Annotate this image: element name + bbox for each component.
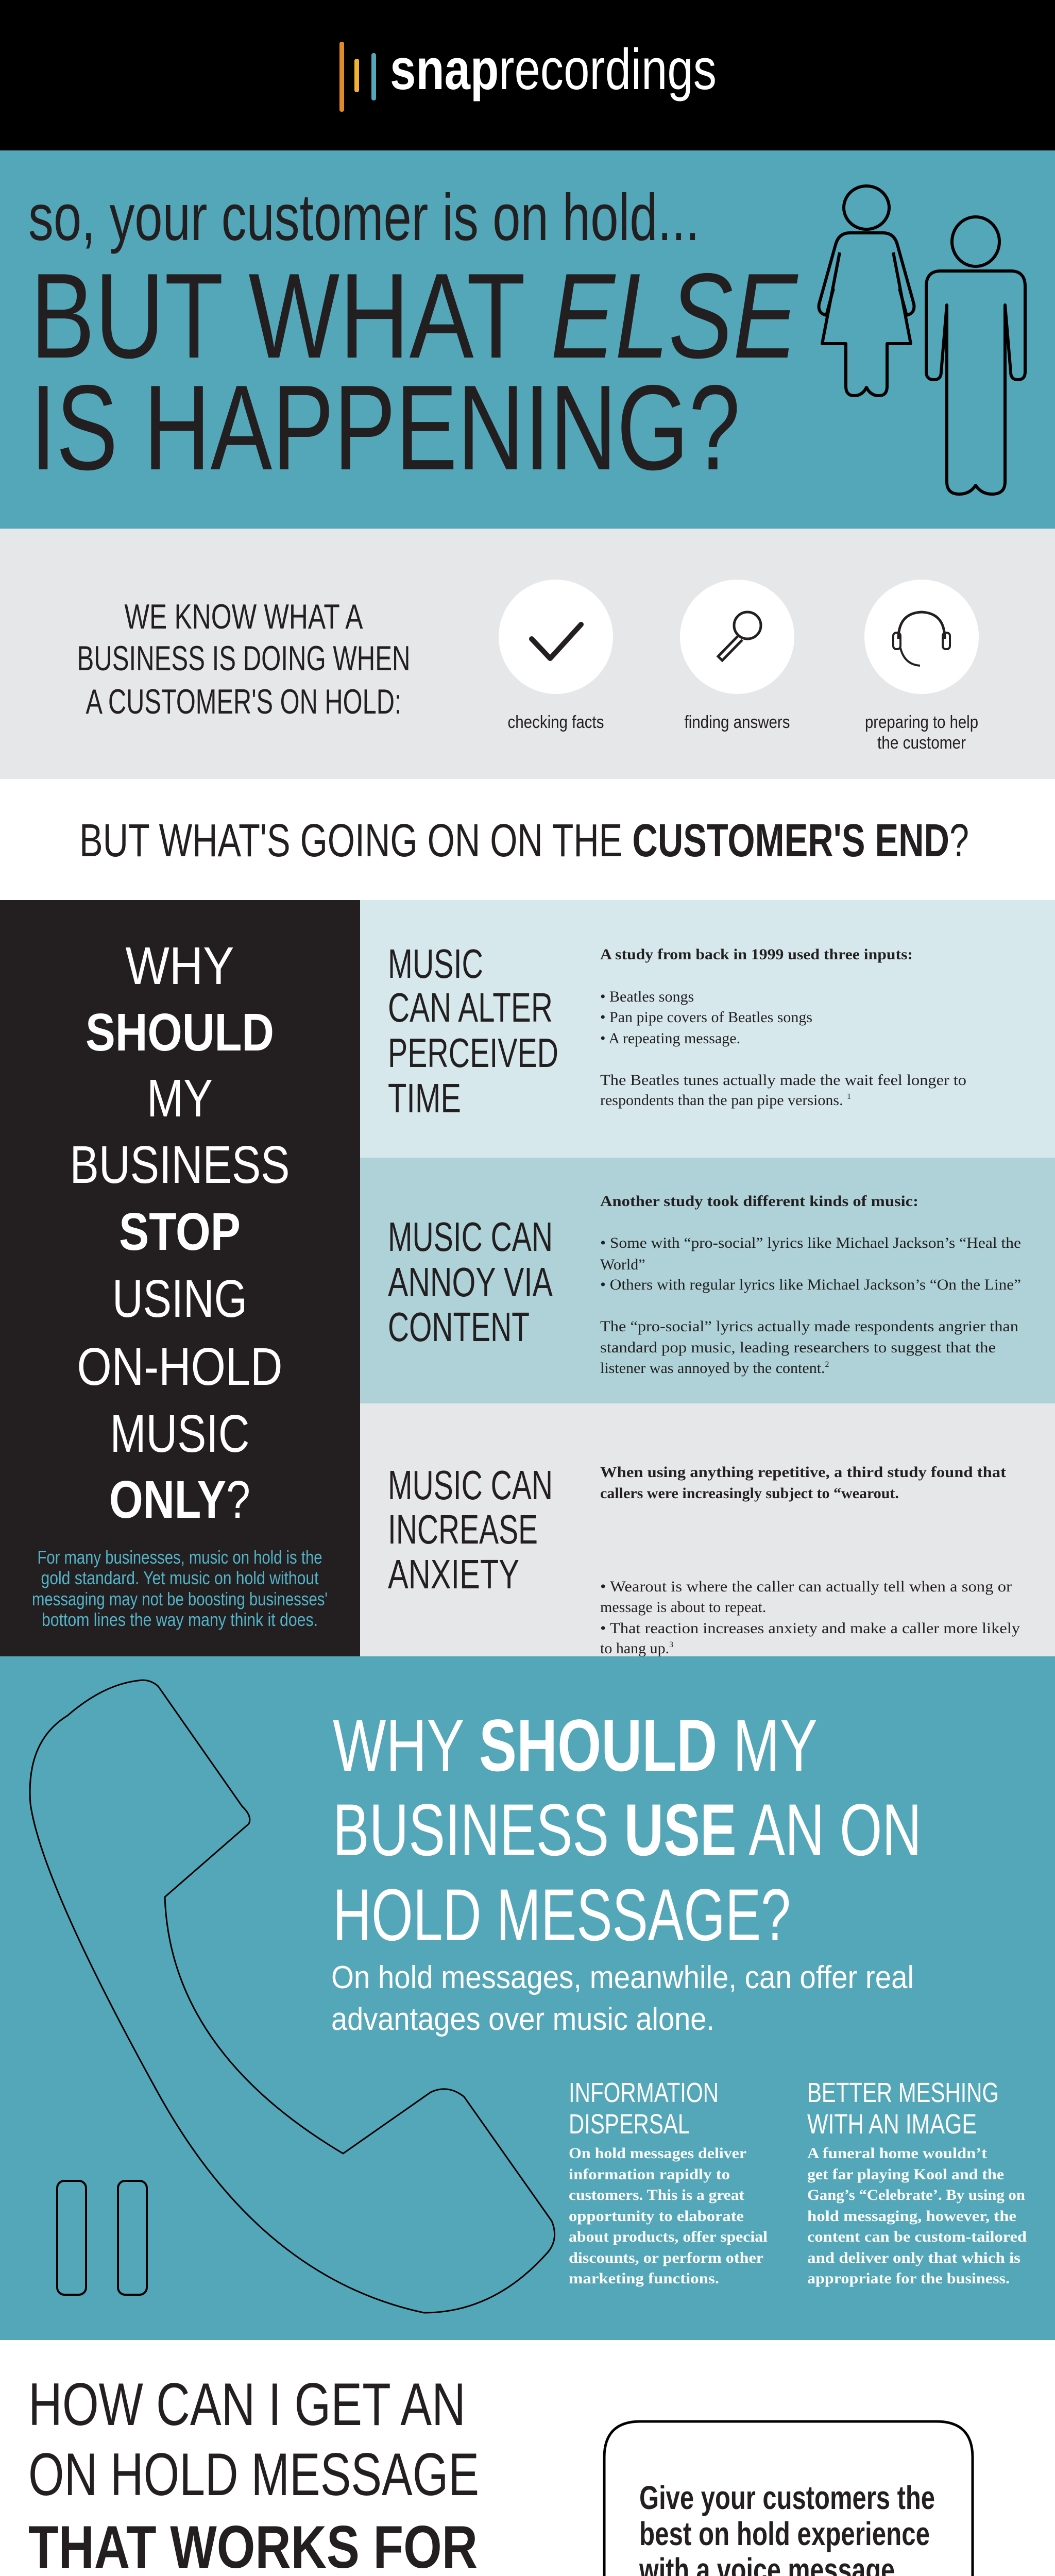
icon: checking facts: checking facts [508, 713, 604, 732]
row body: listener was annoyed by the content. [600, 1360, 825, 1377]
icon: pause bars [57, 2181, 147, 2295]
intro text [77, 597, 410, 721]
dark panel note: bottom lines the way many think it does. [42, 1609, 318, 1630]
subsection: better meshing: and deliver only that which is [807, 2249, 1020, 2266]
section subtitle [331, 1960, 914, 2037]
subsection: better meshing [807, 2077, 1027, 2287]
panel: music can annoy via content [360, 1158, 1055, 1403]
dark panel heading: USING [112, 1269, 247, 1328]
subsection: better meshing: Gang’s “Celebrate’. By using on [807, 2187, 1025, 2204]
dark panel note [32, 1547, 328, 1630]
row heading: ANNOY VIA [388, 1259, 553, 1305]
row body: • Wearout is where the caller can actually tell when a song or [600, 1578, 1012, 1595]
intro text: BUSINESS IS DOING WHEN [77, 639, 410, 678]
row heading [388, 1462, 553, 1597]
dark panel heading: MY [147, 1069, 213, 1128]
icon: headset: the customer [877, 733, 966, 753]
subsection: information dispersal: discounts, or perform other [569, 2249, 763, 2266]
dark panel note: messaging may not be boosting businesses' [32, 1588, 328, 1609]
row heading: MUSIC [388, 941, 483, 987]
dark panel heading: BUSINESS [70, 1135, 290, 1194]
subsection: better meshing: content can be custom-tailored [807, 2228, 1027, 2245]
heading: how can I get: HOW CAN I GET AN [28, 2370, 466, 2438]
subsection: better meshing: BETTER MESHING [807, 2077, 999, 2108]
icon: man figure [926, 217, 1025, 494]
row body: When using anything repetitive, a third study found that [600, 1464, 1006, 1481]
row body: • Some with “pro-social” lyrics like Michael Jackson’s “Heal the [600, 1234, 1021, 1251]
row body: callers were increasingly subject to “wearout. [600, 1485, 899, 1502]
callout: speech bubble [604, 2421, 973, 2576]
subsection: better meshing: WITH AN IMAGE [807, 2109, 977, 2140]
hero subtitle: so, your customer is on hold... [28, 181, 700, 255]
row heading: MUSIC CAN [388, 1214, 553, 1260]
icon: finding answers: finding answers [684, 713, 790, 732]
section subtitle: On hold messages, meanwhile, can offer real [331, 1960, 914, 1995]
subsection: information dispersal [569, 2077, 768, 2287]
dark panel heading [70, 936, 290, 1529]
row body [600, 1464, 1020, 1657]
panel: music can alter perceived time [360, 900, 1055, 1158]
row body: • A repeating message. [600, 1030, 740, 1047]
row body: 2 [825, 1360, 829, 1369]
row body: The Beatles tunes actually made the wait feel longer to [600, 1072, 966, 1089]
subsection: better meshing: get far playing Kool and the [807, 2166, 1004, 2183]
row body: World” [600, 1256, 645, 1273]
subsection: information dispersal: about products, offer special [569, 2228, 768, 2245]
row heading: TIME [388, 1075, 461, 1121]
row body: • Others with regular lyrics like Michael Jackson’s “On the Line” [600, 1276, 1021, 1293]
icon: headset [864, 580, 979, 753]
row body: to hang up. [600, 1640, 669, 1657]
subsection: information dispersal: information rapidly to [569, 2166, 730, 2183]
row heading: CAN ALTER [388, 985, 553, 1030]
hero title: BUT WHAT ELSE [30, 248, 798, 383]
icon: woman figure [819, 186, 914, 396]
hero title [30, 248, 798, 495]
section heading [333, 1705, 922, 1956]
subsection: information dispersal: customers. This is a great [569, 2187, 744, 2204]
row heading: PERCEIVED [388, 1030, 558, 1076]
heading: how can I get [28, 2370, 479, 2576]
icon: checking facts [499, 580, 613, 732]
row body: standard pop music, leading researchers to suggest that the [600, 1339, 996, 1356]
dark panel heading: ONLY? [109, 1470, 250, 1529]
row body: A study from back in 1999 used three inputs: [600, 946, 913, 963]
row heading: MUSIC CAN [388, 1462, 553, 1508]
row body: 1 [847, 1092, 851, 1101]
section heading: HOLD MESSAGE? [333, 1874, 791, 1956]
row body: • That reaction increases anxiety and make a caller more likely [600, 1620, 1020, 1637]
logo [339, 37, 717, 112]
subsection: information dispersal: DISPERSAL [569, 2109, 690, 2140]
row heading [388, 941, 558, 1121]
hero title: IS HAPPENING? [30, 360, 740, 495]
panel: why stop music only [0, 900, 360, 1656]
row body: respondents than the pan pipe versions. [600, 1092, 843, 1109]
dark panel heading: SHOULD [86, 1003, 274, 1062]
logo: snaprecordings [390, 37, 717, 101]
dark panel heading: STOP [119, 1202, 241, 1261]
section subtitle: advantages over music alone. [331, 2002, 714, 2037]
subsection: information dispersal: marketing functions. [569, 2270, 719, 2287]
intro text: A CUSTOMER'S ON HOLD: [86, 682, 402, 721]
dark panel note: For many businesses, music on hold is the [37, 1547, 322, 1568]
row body [600, 1193, 1021, 1377]
icon: finding answers [680, 580, 794, 732]
row heading: CONTENT [388, 1304, 530, 1350]
heading: how can I get: ON HOLD MESSAGE [28, 2441, 479, 2508]
panel: music can increase anxiety [360, 1403, 1055, 1657]
subsection: information dispersal: INFORMATION [569, 2077, 719, 2108]
row body: The “pro-social” lyrics actually made respondents angrier than [600, 1318, 1018, 1335]
subsection: better meshing: A funeral home wouldn’t [807, 2145, 987, 2162]
row body: 3 [669, 1640, 673, 1649]
heading: customer's end: BUT WHAT'S GOING ON ON THE CUSTOMER'S END? [79, 815, 969, 867]
row body: • Pan pipe covers of Beatles songs [600, 1009, 812, 1026]
panel: what a business is doing [0, 529, 1055, 779]
dark panel heading: MUSIC [110, 1404, 249, 1463]
row body: message is about to repeat. [600, 1599, 766, 1616]
row body [600, 946, 966, 1109]
row heading: ANXIETY [388, 1551, 519, 1597]
intro text: WE KNOW WHAT A [125, 597, 363, 636]
row heading: INCREASE [388, 1506, 538, 1552]
subsection: information dispersal: On hold messages deliver [569, 2145, 746, 2162]
row body: • Beatles songs [600, 988, 694, 1005]
dark panel heading: ON-HOLD [77, 1337, 282, 1396]
dark panel heading: WHY [126, 936, 234, 995]
callout: speech bubble: best on hold experience [639, 2515, 930, 2552]
subsection: better meshing: hold messaging, however, the [807, 2208, 1016, 2225]
hero panel [0, 150, 1055, 529]
header bar [0, 0, 1055, 150]
dark panel note: gold standard. Yet music on hold without [41, 1567, 318, 1588]
section heading: BUSINESS USE AN ON [333, 1789, 922, 1871]
row body: Another study took different kinds of music: [600, 1193, 918, 1210]
icon: headset: preparing to help [865, 713, 978, 732]
panel: why use on hold message [0, 1656, 1055, 2340]
section heading: WHY SHOULD MY [333, 1705, 818, 1787]
subsection: information dispersal: opportunity to elaborate [569, 2208, 744, 2225]
callout: speech bubble: Give your customers the [639, 2479, 935, 2516]
subsection: better meshing: appropriate for the business. [807, 2270, 1010, 2287]
icon: phone handset [30, 1680, 555, 2313]
row heading [388, 1214, 553, 1350]
